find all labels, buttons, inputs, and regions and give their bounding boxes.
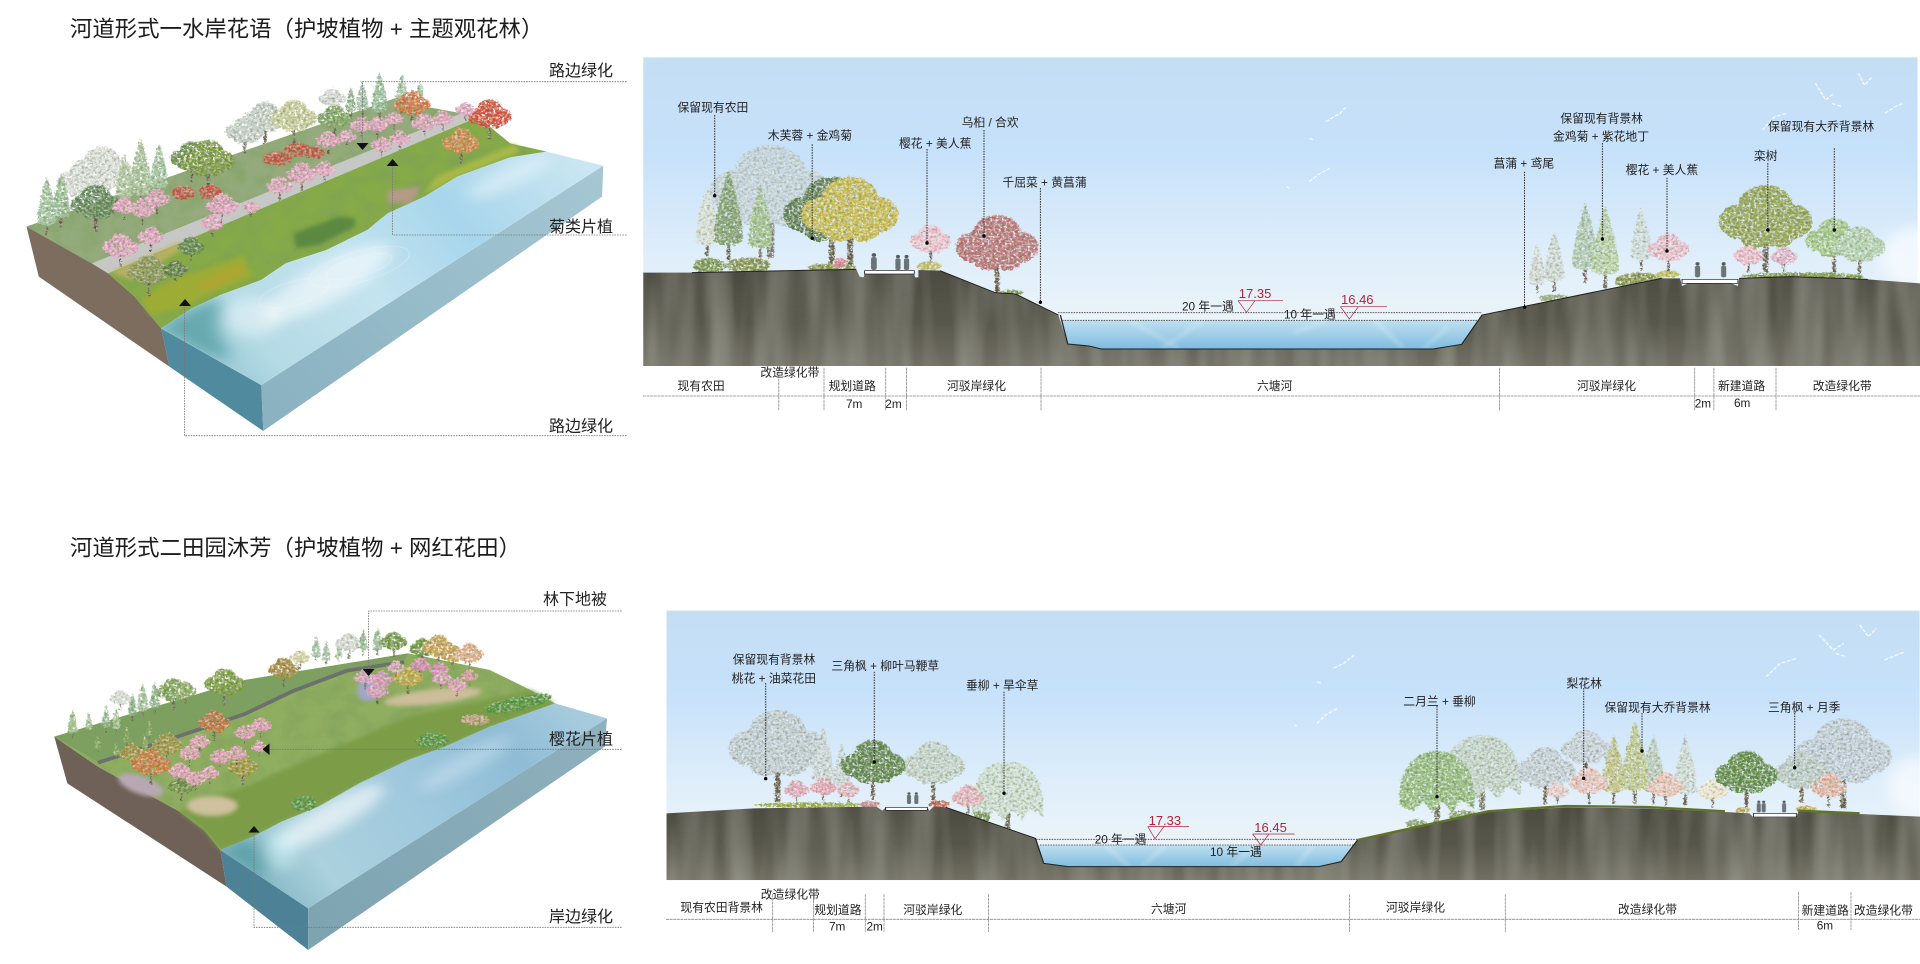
callout: 樱花片植: 樱花片植 [549, 730, 613, 748]
level 20 year 17.35 [1182, 286, 1283, 314]
upper terrace [27, 97, 461, 263]
zone names and widths: 河驳岸绿化 [1386, 901, 1445, 915]
label: 保留现有农田: 保留现有农田 [678, 101, 748, 115]
background trees left [693, 145, 1038, 295]
walkway [92, 113, 478, 273]
glow at right horizon [1881, 227, 1920, 287]
water front-right face [308, 718, 607, 950]
panel: section two cross-section drawing [667, 611, 1920, 881]
3D river block two [54, 627, 607, 950]
water reflections [1130, 320, 1448, 348]
level 20 year 17.33 [1095, 813, 1189, 846]
background trees right [1529, 185, 1886, 302]
water front-right face [261, 166, 603, 431]
zone names and widths: 7m [846, 397, 863, 411]
background trees left [728, 710, 1044, 830]
heading: section two title: 河道形式二田园沐芳（护坡植物 + 网红花田） [70, 536, 521, 560]
label: 菖蒲 + 鸢尾: 菖蒲 + 鸢尾 [1494, 156, 1554, 170]
birds [1295, 625, 1905, 726]
zone names and widths: 新建道路 [1802, 904, 1849, 918]
trees: pink cherry along walkway [102, 102, 475, 267]
label: 金鸡菊 + 紫花地丁 [1553, 130, 1649, 241]
zone names and widths: 现有农田背景林 [680, 901, 763, 915]
trees: far-edge row [38, 72, 511, 235]
planting labels: section one left [678, 101, 1087, 304]
birds [1287, 73, 1903, 188]
land surface [54, 653, 555, 850]
shrubs: red and orange beds [172, 143, 325, 199]
level 20 year 17.33: 20 年一遇 [1095, 832, 1147, 846]
darker bank strip [180, 690, 555, 850]
label: 栾树 [1754, 149, 1778, 232]
label: 桃花 + 油菜花田 [732, 672, 816, 780]
label: 木芙蓉 + 金鸡菊 [768, 129, 852, 240]
glow at right horizon [1889, 757, 1920, 817]
callout: 林下地被 [363, 590, 622, 676]
zone table: section two [666, 887, 1920, 934]
grass clumps at shore [292, 690, 554, 811]
terrain outline and grass edge [692, 269, 1868, 349]
zone names and widths: 改造绿化带 [1813, 379, 1872, 393]
zone names and widths: 改造绿化带 [1618, 903, 1677, 917]
road slabs [864, 271, 1738, 283]
callout: 路边绿化 lower: 路边绿化 [549, 418, 613, 436]
grass ridge [1358, 806, 1860, 840]
heading: section one title: 河道形式一水岸花语（护坡植物 + 主题观花林） [70, 16, 543, 42]
ground section [667, 807, 1920, 880]
label: 千屈菜 + 黄菖蒲: 千屈菜 + 黄菖蒲 [1002, 175, 1087, 189]
zone names and widths: 7m [829, 920, 846, 934]
label: 保留现有背景林: 保留现有背景林 [1560, 112, 1643, 126]
label: 菖蒲 + 鸢尾 [1494, 156, 1554, 309]
callout: 樱花片植 [262, 730, 622, 755]
zone names and widths [680, 887, 1913, 934]
label: 二月兰 + 垂柳: 二月兰 + 垂柳 [1403, 695, 1476, 709]
label: 樱花 + 美人蕉 [1626, 163, 1698, 253]
water reflections [1105, 845, 1313, 867]
flood levels: section one [1058, 286, 1482, 321]
table lines [643, 368, 1920, 411]
label: 桃花 + 油菜花田: 桃花 + 油菜花田 [732, 672, 816, 686]
zone names and widths: 2m [866, 920, 883, 934]
trees: far-edge row [68, 627, 484, 738]
flood levels: section two [1036, 813, 1358, 859]
label: 樱花 + 美人蕉: 樱花 + 美人蕉 [1626, 163, 1698, 177]
label: 保留现有大乔背景林 [1768, 119, 1874, 232]
ground section [643, 269, 1920, 366]
winding path [98, 662, 404, 763]
trees: small willows on slope [127, 237, 204, 295]
sky [667, 611, 1920, 881]
zone names and widths: 规划道路 [829, 379, 876, 393]
zone names and widths: 2m [1695, 396, 1711, 410]
label: 三角枫 + 月季: 三角枫 + 月季 [1768, 700, 1841, 714]
label: 保留现有大乔背景林 [1604, 700, 1711, 753]
river water [1060, 320, 1485, 350]
zone names and widths: 现有农田 [678, 379, 725, 393]
background trees right [1400, 718, 1892, 829]
level 10 year 16.45: 16.45 [1254, 820, 1287, 835]
river foam [220, 728, 519, 883]
walkers [907, 792, 1786, 812]
callout: 路边绿化 upper: 路边绿化 [549, 62, 613, 80]
river foam and ripples [161, 148, 559, 360]
level 10 year 16.46: 16.46 [1341, 292, 1374, 307]
water front-left face [220, 850, 308, 950]
planting labels: section two left [732, 652, 1039, 795]
walkers [871, 253, 1726, 277]
label: 樱花 + 美人蕉 [899, 136, 972, 245]
zone names and widths: 六塘河 [1151, 902, 1187, 916]
zone names and widths: 河驳岸绿化 [1577, 379, 1636, 393]
label: 垂柳 + 旱伞草 [966, 679, 1039, 795]
zone names and widths [678, 366, 1872, 411]
soil cut face [27, 227, 169, 367]
label: 二月兰 + 垂柳 [1403, 695, 1476, 798]
beige and lavender beds [114, 679, 482, 816]
panel: section one cross-section drawing [643, 57, 1920, 366]
terrain outline and grass edge [946, 807, 1358, 867]
planting beds on slope [110, 144, 520, 315]
callout: 林下地被: 林下地被 [543, 590, 607, 608]
level 10 year 16.45: 10 年一遇 [1210, 845, 1262, 859]
label: 三角枫 + 月季 [1768, 700, 1841, 769]
zone names and widths: 六塘河 [1257, 379, 1293, 393]
river surface [161, 152, 603, 385]
zone names and widths: 改造绿化带 [761, 887, 820, 901]
label: 梨花林: 梨花林 [1566, 676, 1602, 690]
label: 保留现有农田 [678, 101, 748, 197]
label: 千屈菜 + 黄菖蒲 [1002, 175, 1087, 304]
zone names and widths: 改造绿化带 [760, 366, 820, 380]
water front-left face [161, 328, 263, 431]
river water [1038, 845, 1358, 868]
callout: 路边绿化 lower [179, 299, 626, 436]
dashed water lines [1058, 313, 1482, 320]
planting labels: section two right [1403, 676, 1841, 798]
label: 保留现有大乔背景林: 保留现有大乔背景林 [1768, 119, 1874, 133]
sky [643, 57, 1918, 366]
planting labels: section one right [1494, 112, 1874, 309]
label: 三角枫 + 柳叶马鞭草: 三角枫 + 柳叶马鞭草 [831, 659, 939, 673]
label: 栾树: 栾树 [1754, 149, 1778, 163]
level 20 year 17.35: 20 年一遇 [1182, 300, 1234, 314]
zone table: section one [643, 366, 1920, 411]
zone names and widths: 河驳岸绿化 [947, 379, 1006, 393]
zone names and widths: 规划道路 [814, 903, 862, 917]
zone names and widths: 6m [1734, 396, 1751, 410]
label: 金鸡菊 + 紫花地丁: 金鸡菊 + 紫花地丁 [1553, 130, 1649, 144]
level 10 year 16.46: 10 年一遇 [1284, 307, 1336, 321]
label: 保留现有背景林: 保留现有背景林 [733, 652, 815, 666]
label: 梨花林 [1566, 676, 1602, 780]
callout: 岸边绿化 [248, 826, 622, 927]
callout: 岸边绿化: 岸边绿化 [549, 908, 613, 926]
label: 保留现有大乔背景林: 保留现有大乔背景林 [1604, 700, 1711, 714]
label: 垂柳 + 旱伞草: 垂柳 + 旱伞草 [966, 679, 1039, 693]
label: 乌桕 / 合欢 [962, 116, 1019, 238]
upper meadow beyond path [54, 653, 408, 762]
level 10 year 16.46 [1284, 292, 1387, 321]
zone names and widths: 新建道路 [1718, 379, 1765, 393]
label: 乌桕 / 合欢: 乌桕 / 合欢 [962, 116, 1019, 130]
label: 樱花 + 美人蕉: 樱花 + 美人蕉 [899, 136, 972, 150]
callout: 菊类片植: 菊类片植 [549, 218, 613, 236]
label: 三角枫 + 柳叶马鞭草 [831, 659, 939, 764]
level 20 year 17.35: 17.35 [1239, 286, 1271, 301]
callout: 菊类片植 [387, 159, 626, 236]
river surface [220, 703, 607, 908]
flower cluster upper [355, 658, 478, 704]
flower cluster lower [95, 711, 272, 801]
land surface [27, 97, 547, 328]
zone names and widths: 改造绿化带 [1854, 904, 1913, 918]
level 10 year 16.45 [1210, 820, 1295, 859]
zone names and widths: 6m [1817, 919, 1833, 933]
zone names and widths: 2m [885, 397, 902, 411]
water lines [1036, 839, 1358, 845]
callout: 路边绿化 upper [356, 62, 626, 150]
road slabs [886, 807, 1796, 817]
soil cut face [54, 737, 227, 887]
level 20 year 17.33: 17.33 [1149, 813, 1181, 828]
label: 木芙蓉 + 金鸡菊: 木芙蓉 + 金鸡菊 [768, 129, 852, 143]
table lines [666, 892, 1920, 932]
3D river block one [27, 72, 603, 431]
zone names and widths: 河驳岸绿化 [903, 903, 962, 917]
